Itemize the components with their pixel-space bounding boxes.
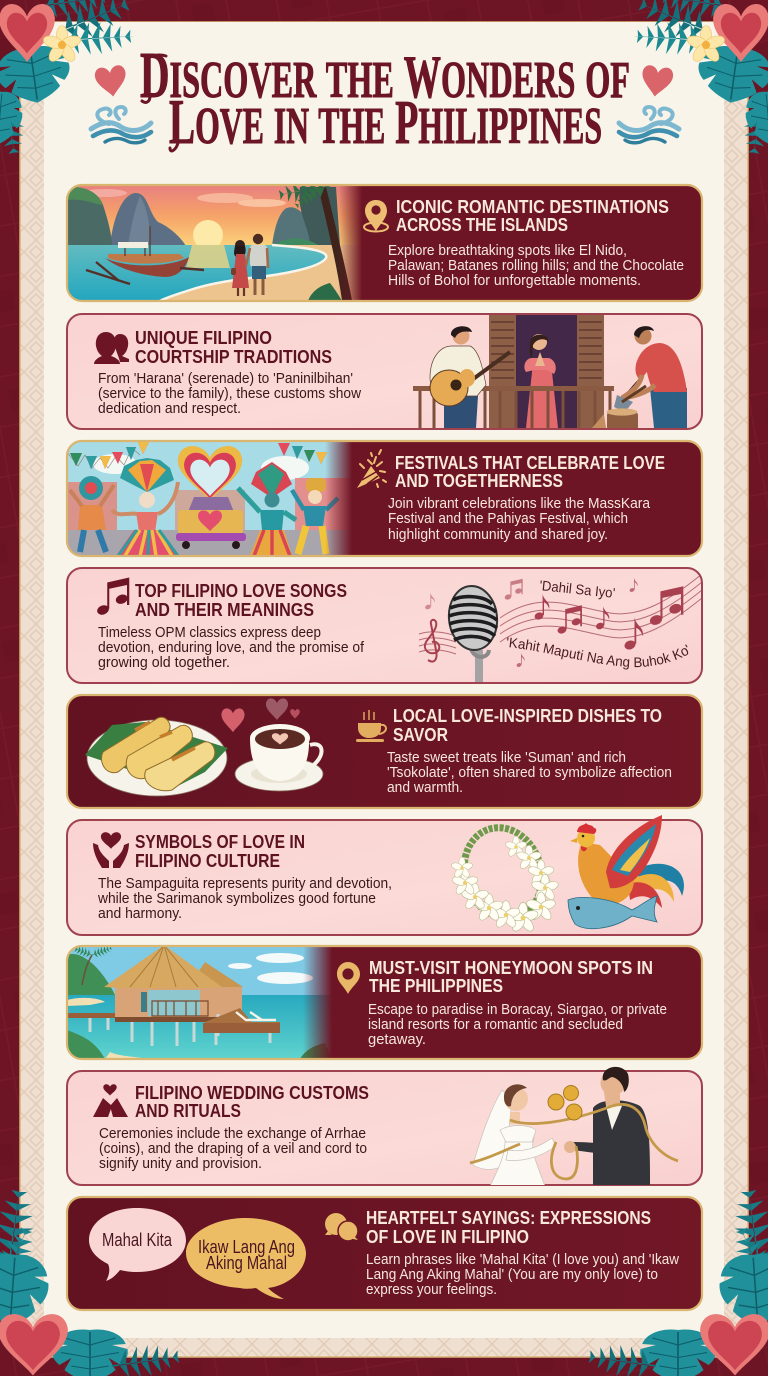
body text: and warmth. — [387, 779, 463, 796]
speech bubble: Ikaw Lang Ang Aking Mahal: Aking Mahal — [206, 1253, 287, 1273]
heading: AND THEIR MEANINGS — [135, 599, 314, 620]
treble clef — [425, 620, 439, 662]
panel border — [67, 568, 702, 683]
panel: dishes — [67, 695, 702, 808]
heading: UNIQUE FILIPINO — [135, 327, 272, 348]
body text: devotion, enduring love, and the promise of — [98, 639, 365, 656]
panel base — [67, 568, 702, 683]
body text: dedication and respect. — [98, 400, 241, 417]
panel: heartfelt sayings — [67, 1197, 702, 1310]
image fade — [326, 442, 362, 555]
panel base — [67, 185, 702, 301]
panel border — [67, 185, 702, 301]
heading: SYMBOLS OF LOVE IN — [135, 831, 305, 852]
body text: growing old together. — [98, 654, 230, 671]
panel border — [67, 1071, 702, 1185]
body text: Festival and the Pahiyas Festival, which — [388, 510, 628, 527]
body text — [366, 1251, 679, 1298]
dancer 3 — [238, 462, 296, 556]
heading: COURTSHIP TRADITIONS — [135, 346, 332, 367]
body text — [388, 242, 684, 289]
illustration: sunset beach couple — [68, 186, 361, 300]
body text: Join vibrant celebrations like the MassKara — [388, 495, 651, 512]
panel base — [67, 314, 702, 429]
illustration: microphone and music staff — [418, 576, 701, 682]
song label: Kahit Maputi Na Ang Buhok Ko: 'Kahit Maputi Na Ang Buhok Ko' — [507, 638, 688, 670]
body text: (coins), and the draping of a veil and cord to — [99, 1140, 367, 1157]
heading — [135, 580, 347, 620]
corner: bottom right foliage and heart — [582, 1182, 768, 1376]
microphone — [446, 584, 500, 684]
speech bubble: Ikaw Lang Ang Aking Mahal: Ikaw Lang Ang — [198, 1237, 295, 1257]
body text: Taste sweet treats like 'Suman' and rich — [387, 749, 626, 766]
body text: From 'Harana' (serenade) to 'Paninilbihan' — [98, 370, 353, 387]
panel: wedding customs — [67, 1067, 702, 1186]
title — [140, 39, 630, 157]
corner: top right foliage and heart — [629, 0, 768, 159]
panel border — [67, 946, 702, 1059]
heading — [135, 327, 332, 367]
illustration: sarimanok rooster on fish — [568, 815, 684, 929]
icon: waves right — [619, 107, 679, 143]
heading — [393, 705, 662, 745]
body text: Escape to paradise in Boracay, Siargao, or private — [368, 1001, 667, 1018]
body text: island resorts for a romantic and secluded — [368, 1016, 623, 1033]
heart float — [176, 446, 246, 549]
speech bubble: Mahal Kita: Mahal Kita — [102, 1230, 173, 1250]
heading: FESTIVALS THAT CELEBRATE LOVE — [395, 452, 665, 473]
heading — [369, 957, 653, 996]
illustration: bride and groom — [470, 1067, 678, 1186]
icon: title heart left — [94, 64, 129, 99]
body text: while the Sarimanok symbolizes good fortune — [97, 890, 376, 907]
heading: AND TOGETHERNESS — [395, 470, 563, 491]
icon: hands holding heart — [93, 832, 129, 868]
corner: bottom left foliage and heart — [0, 1182, 186, 1376]
illustration: overwater bungalow — [67, 943, 337, 1059]
body text — [387, 749, 672, 796]
music staff — [419, 574, 702, 654]
body text: Explore breathtaking spots like El Nido, — [388, 242, 627, 259]
body text — [97, 875, 392, 922]
heading: TOP FILIPINO LOVE SONGS — [135, 580, 347, 601]
title: DISCOVER THE WONDERS OF — [140, 39, 630, 112]
panel base — [67, 1071, 702, 1185]
dancer 2 — [112, 458, 180, 556]
illustration: tsokolate cup and saucer — [235, 724, 323, 791]
illustration: harana and paninilbihan — [413, 314, 687, 430]
icon: chat bubbles — [325, 1213, 358, 1241]
heading — [366, 1207, 651, 1247]
heading — [135, 1082, 369, 1121]
body text — [368, 1001, 667, 1048]
image fade — [304, 947, 337, 1058]
body text: Learn phrases like 'Mahal Kita' (I love you) and 'Ikaw — [366, 1251, 679, 1268]
panel: love songs — [66, 567, 703, 684]
panel base — [67, 1197, 702, 1310]
dancer 4 — [292, 478, 338, 554]
speech bubble: Ikaw Lang Ang Aking Mahal — [186, 1218, 306, 1299]
heading: ICONIC ROMANTIC DESTINATIONS — [396, 196, 669, 217]
panel: festivals — [67, 441, 702, 556]
icon: couple silhouettes — [94, 332, 129, 364]
song label: Dahil Sa Iyo: 'Dahil Sa Iyo' — [539, 577, 616, 601]
body text: The Sampaguita represents purity and devotion, — [98, 875, 392, 892]
panel border — [67, 441, 702, 556]
panel border — [67, 314, 702, 429]
body text: getaway. — [368, 1031, 426, 1048]
illustration: festival dancers and heart float — [67, 441, 362, 556]
panel: courtship traditions — [67, 314, 702, 430]
icon: waves left — [91, 107, 151, 143]
speech bubble: Mahal Kita — [89, 1208, 186, 1281]
panel: honeymoon spots — [67, 943, 702, 1059]
panel base — [67, 820, 702, 935]
body text: Lang Ang Aking Mahal' (You are my only love) to — [366, 1266, 658, 1283]
body text — [98, 370, 361, 417]
icon: location pin — [364, 200, 388, 232]
notes — [424, 578, 683, 668]
icon: wedding hands — [93, 1084, 128, 1117]
paper top extension — [22, 24, 746, 100]
body text: highlight community and shared joy. — [388, 526, 608, 543]
title: LOVE IN THE PHILIPPINES — [169, 86, 602, 157]
panel base — [67, 695, 702, 808]
body text: 'Tsokolate', often shared to symbolize affection — [387, 764, 672, 781]
heading: MUST-VISIT HONEYMOON SPOTS IN — [369, 957, 653, 978]
body text: Ceremonies include the exchange of Arrhae — [99, 1125, 366, 1142]
image fade — [339, 186, 370, 300]
heading: THE PHILIPPINES — [369, 975, 503, 996]
body text: signify unity and provision. — [99, 1155, 262, 1172]
panel base — [67, 441, 702, 556]
heading: SAVOR — [393, 724, 448, 745]
heading: HEARTFELT SAYINGS: EXPRESSIONS — [366, 1207, 651, 1228]
body text: Timeless OPM classics express deep — [98, 624, 321, 641]
icon: title heart right — [639, 64, 674, 99]
heading: FILIPINO WEDDING CUSTOMS — [135, 1082, 369, 1103]
icon: party popper — [357, 450, 386, 488]
heading — [395, 452, 665, 491]
body text — [98, 624, 365, 671]
heading: AND RITUALS — [135, 1100, 241, 1121]
panel base — [67, 946, 702, 1059]
heading: LOCAL LOVE-INSPIRED DISHES TO — [393, 705, 662, 726]
panel: symbols of love — [67, 815, 702, 935]
body text — [99, 1125, 367, 1172]
illustration: suman on a plate — [85, 717, 228, 796]
heading: FILIPINO CULTURE — [135, 850, 280, 871]
heading — [135, 831, 305, 871]
icon: music notes — [96, 578, 129, 616]
body text: and harmony. — [98, 905, 182, 922]
dancer 1 — [70, 476, 114, 552]
icon: floating hearts — [221, 698, 300, 732]
heading: OF LOVE IN FILIPINO — [366, 1226, 529, 1247]
corner: top left foliage and heart — [0, 0, 139, 159]
body text: Hills of Bohol for unforgettable moments. — [388, 272, 641, 289]
heading: ACROSS THE ISLANDS — [396, 214, 568, 235]
body text: Palawan; Batanes rolling hills; and the Chocolate — [388, 257, 684, 274]
icon: coffee cup — [356, 710, 386, 742]
body text — [388, 495, 651, 543]
body text: (service to the family), these customs show — [98, 385, 361, 402]
panel: iconic romantic destinations — [67, 174, 702, 301]
body text: express your feelings. — [366, 1281, 497, 1298]
heading — [396, 196, 669, 235]
illustration: sampaguita garland — [451, 818, 559, 933]
icon: location pin — [337, 962, 360, 994]
